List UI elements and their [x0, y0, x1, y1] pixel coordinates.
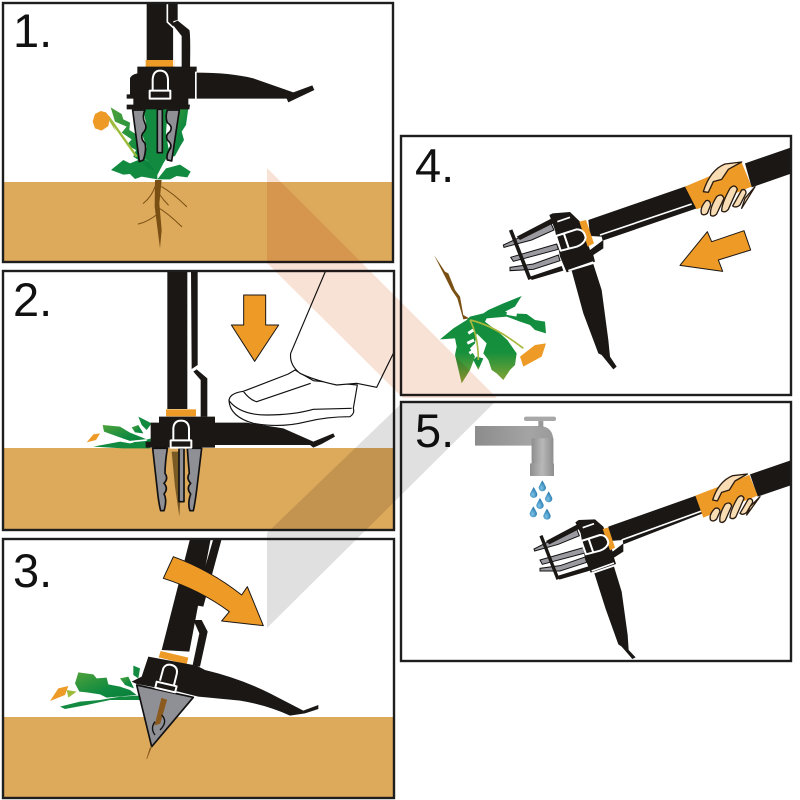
- shaft: [147, 3, 173, 60]
- leg of tool: [572, 264, 617, 369]
- panel 5: rinsing the tool: [415, 404, 792, 659]
- head: [127, 67, 197, 109]
- panel 3 dandelion: [50, 666, 140, 709]
- orange collar: [603, 527, 615, 550]
- panel 2: pressing the foot plate: [3, 267, 395, 530]
- hand: [710, 474, 760, 522]
- rod: [173, 4, 190, 67]
- rod hook: [193, 620, 208, 667]
- boot: [229, 370, 357, 425]
- panel 2 flattened dandelion: [87, 417, 152, 448]
- panel 1 dandelion: [93, 99, 191, 248]
- padlock: [581, 535, 608, 554]
- shaft: [167, 272, 187, 409]
- root: [172, 452, 182, 517]
- orange collar: [159, 651, 188, 664]
- overlay: grey translucent chevron arm: [267, 402, 495, 628]
- jaws: [133, 109, 179, 162]
- number 3: 3.: [13, 544, 52, 597]
- trouser: [291, 267, 395, 387]
- shaft: [162, 539, 211, 652]
- hand: [701, 162, 755, 216]
- jaws: [153, 448, 202, 511]
- panel 5 shaft: [608, 460, 792, 544]
- number 4: 4.: [415, 139, 454, 192]
- padlock: [171, 421, 191, 448]
- leaves: [109, 108, 191, 180]
- rear plate: [511, 230, 530, 279]
- root: [147, 698, 167, 759]
- water drops: [530, 480, 552, 520]
- panel 2 soil: [3, 448, 394, 530]
- foot lever: [197, 73, 314, 102]
- padlock: [150, 71, 170, 99]
- rear plate: [541, 536, 558, 579]
- flower: [520, 343, 546, 367]
- number 1: 1.: [13, 4, 52, 57]
- panel 3: levering the tool back: [3, 539, 394, 798]
- jaws: [534, 524, 590, 580]
- rod: [191, 272, 207, 417]
- panel 3 soil: [3, 717, 394, 798]
- root: [138, 180, 187, 248]
- faucet: [475, 417, 556, 476]
- orange collar: [579, 220, 594, 247]
- leaves: [440, 296, 546, 383]
- panel 4 shaft: [588, 147, 792, 241]
- panel 1 tool: [127, 3, 314, 162]
- panel 4: ejecting the weed: [415, 139, 792, 383]
- number 2: 2.: [13, 273, 52, 326]
- head: [146, 417, 335, 448]
- orange grip: [685, 163, 752, 209]
- arrow down: [231, 295, 279, 361]
- padlock: [556, 229, 586, 251]
- dandelion removed: [434, 255, 546, 383]
- arrow curved: [163, 557, 263, 626]
- jaws: [503, 218, 563, 280]
- panel 1 soil: [3, 182, 393, 262]
- number 5: 5.: [415, 404, 454, 457]
- root: [434, 255, 469, 319]
- arrow left: [680, 231, 751, 271]
- padlock: [155, 665, 177, 692]
- head and lever: [132, 657, 318, 716]
- orange collar: [146, 60, 175, 67]
- flower: [93, 111, 110, 131]
- head: [549, 212, 603, 272]
- overlay: orange translucent chevron arm: [267, 168, 497, 398]
- orange collar: [166, 409, 196, 416]
- head: [575, 519, 623, 573]
- jaws: [137, 685, 193, 747]
- panel 1: tool placed over the dandelion: [3, 3, 393, 262]
- leg of tool: [594, 567, 636, 659]
- orange grip: [695, 475, 758, 518]
